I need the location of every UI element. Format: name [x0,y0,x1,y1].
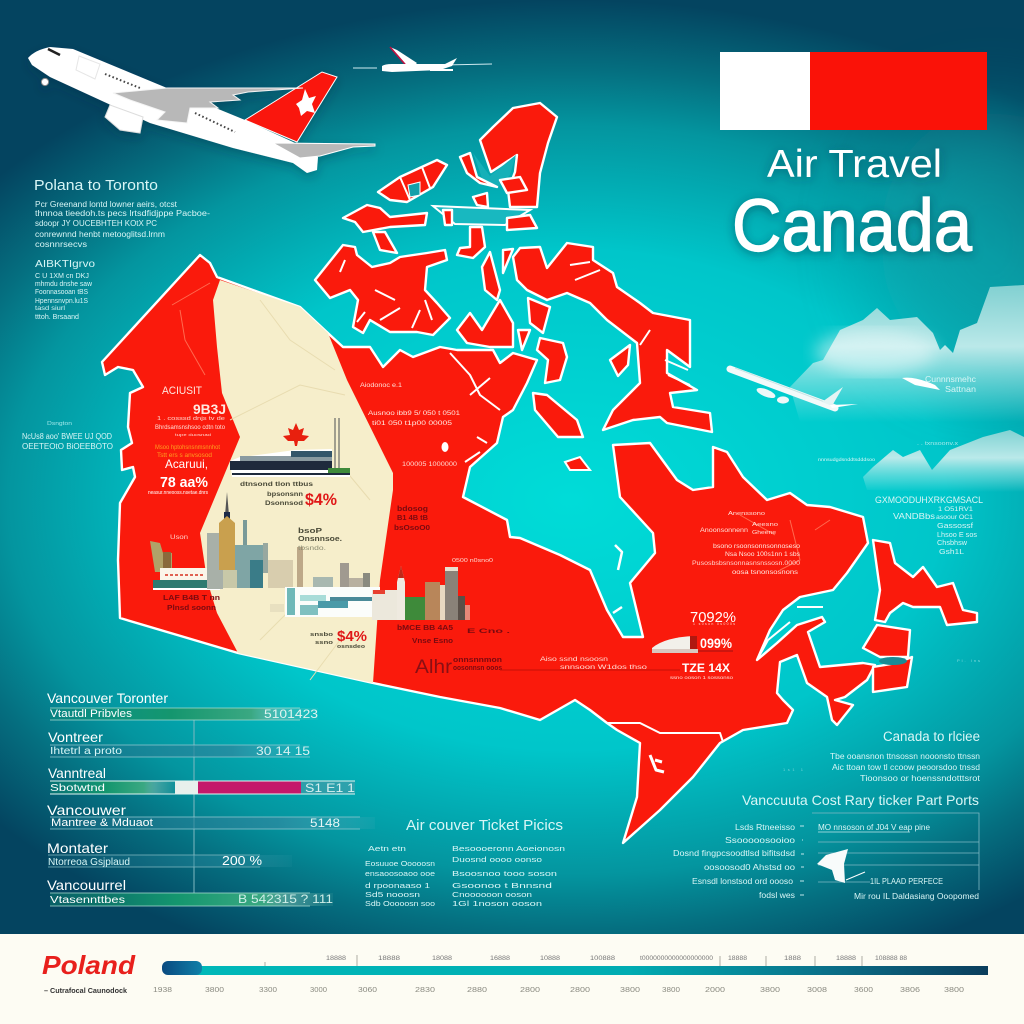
text block: air ticket prices: Air couver Ticket Picics [406,817,563,834]
region: cream central province [200,280,393,683]
timeline years: 2000 [705,985,725,994]
timeline years: 3000 [310,985,327,994]
caption: – Cutrafocal Caunodock [44,986,128,995]
text block: air travel small: Foonnasooan tBS [35,289,88,296]
text block: central red region: ti01 050 t1p00 00005 [372,420,452,427]
text block: eastern region stats: Aeesno [752,522,778,528]
list labels: Dosnd fingpcsoodtlsd bifitsdsd [673,848,795,858]
timeline years: 3800 [760,985,780,994]
timeline top labels: 18888 [378,956,401,962]
icon: train [652,636,695,649]
text block: west coast caption [22,421,113,451]
text block: Poland to Toronto: Pcr Greenand lontd lowner aeirs, otcst [35,200,178,209]
text block: cream region stats: tbsndo. [298,546,326,552]
text block: right side caption: VANDBbs [893,512,935,521]
text block: west coast caption: OEETEOtO BiOEEBOTO [22,442,113,451]
text block: western province stats: 78 aa% [160,474,208,491]
timeline top labels: 18088 [432,956,453,962]
text block: air travel small: tasd siurl [35,306,65,312]
text block: central red region: Aiodonoc e.1 [360,383,403,389]
text block: west coast caption: NcUs8 aoo' BWEE UJ QOD [22,432,112,441]
text block: Poland to Toronto: thnnoa tieedoh.ts pecs lrtsdfidjppe Pacboe- [35,209,210,218]
text block: central red region: E Cno . [467,629,511,635]
text block: right side caption: GXMOODUHXRKGMSACL [875,495,983,505]
timeline years: 3800 [662,985,680,994]
text block: eastern region stats: Gheene [752,530,776,536]
text block: right side caption: Gsh1L [939,549,964,556]
stat callout with train: TZE 14X [682,661,730,675]
timeline top labels [326,956,908,962]
text block: eastern region stats: Pusosbsbsnsonnasnsnssosn.0000 [692,560,800,567]
text block: air travel small: tttoh. Brsaand [35,314,79,321]
timeline years: 2880 [467,985,487,994]
text block: air ticket prices: Eosuuoe Ooooosn [365,859,435,868]
timeline years: 2800 [520,985,540,994]
text block: central red region: Vnse Esno [412,638,453,645]
text block: air travel small: C U 1XM cn DKJ [35,273,89,280]
text block: Canada prices: Aic ttoan tow tl ccoow peoorsdoo tnssd [832,763,980,772]
terminal [230,449,350,477]
text block: Canada prices [830,729,981,783]
fuselage [28,47,318,173]
text block: right side caption: Chsbhsw [937,540,968,547]
airplane: far right with caption: Sattnan [945,385,976,394]
text block: central red region: Ausnoo ibb9 5/ 050 t 0501 [368,410,460,417]
text block: Canada prices: Canada to rlciee [883,729,980,744]
illustration: city skyline west [150,492,370,590]
text block: central red region: bsOsoO0 [394,525,430,532]
illustration: airport and maple leaf [230,418,350,477]
text block: right side caption: . . txnsoonv.x [917,441,959,447]
stat callout with train: ssno ooson 1 sossonso [670,675,734,680]
illustration: city skyline east [372,566,470,620]
text block: right side caption: 1 O51RV1 [938,507,974,513]
text block: western province stats: Tstt ers s anvsosod [157,453,212,459]
text block: right side caption: 1s1 1 [783,767,804,772]
stat callout with train: 7092% [690,609,736,626]
text block: cream region stats: $4% [305,490,337,509]
text block: air ticket prices: Bsoosnoo tooo soson [452,869,557,878]
text block: right side caption: Lhsoo E sos [937,532,978,539]
text block: right side caption: Pl. Ins [957,658,980,663]
text block: central red region: onnsnnmon [453,657,502,664]
timeline top labels: 18888 [728,956,748,962]
title: Canada [732,184,973,267]
timeline top labels: 18888 [326,956,347,962]
text block: air ticket prices: 1Gl 1noson ooson [452,899,542,908]
chart panel: cost ranking [673,792,979,901]
text block: air travel small: mhmdu dnshe saw [35,281,93,288]
list labels: Esnsdl lonstsod ord oooso [692,876,793,886]
text block: central red region: 100005 1000000 [402,461,457,468]
bar row 6: Vtasennttbes [50,895,125,906]
text block: air ticket prices: Aetn etn [368,844,406,853]
text block: western province stats: Uson [170,535,188,541]
chart panel: cost ranking: MO nnsoson of J04 V eap pine [818,823,931,832]
bar row 2: 30 14 15 [256,744,310,758]
airplane: right over clouds [730,368,858,408]
stat callout with train: Aiso ssnd nsoosn [540,657,608,663]
timeline years: 3800 [620,985,640,994]
bar row 2 [48,729,310,758]
bar row 3 [48,765,355,795]
text block: air ticket prices: Cnoooooon ooson [452,890,532,899]
timeline top labels: t0000000000000000000 [640,956,714,962]
text block: eastern region stats: Anenssono [728,511,765,517]
text block: cream region stats: Onsnnsoe. [298,536,342,543]
region: mainland [102,255,875,843]
text block: eastern region stats: oosa tsnonsosnons [732,570,798,576]
text block: cream region stats: bsoP [298,528,322,535]
stat callout with train: 1 s0son 0s000s [693,622,735,626]
bar row 4: Vancouwer [47,802,126,818]
flag panel [720,52,987,130]
timeline years: 3800 [205,985,224,994]
bar row 5: 200 % [222,853,262,868]
text block: eastern region stats: bsono rsoonsonnsonnoseso [713,543,800,550]
text block: western province stats: neasur.nneooss.nsetae.dnrs [148,490,208,496]
windows [105,74,235,132]
chart panel: cost ranking: 1IL PLAAD PERFECE [870,877,943,886]
stabilizer [273,143,375,158]
timeline top labels: 1888 [784,956,802,962]
clouds: upper right [790,285,1024,422]
text block: air travel small: AIBKTIgrvo [35,259,95,270]
illustration: white terminal [270,587,380,617]
stat callout with train [500,609,736,680]
text block: western province stats: ACIUSIT [162,385,202,397]
text block: right side caption: nnnsudgdsnddtsdddsoo [818,457,876,462]
wing [113,88,303,123]
bar row 4 [47,802,375,830]
bar row 2: Ihtetrl a proto [50,746,123,757]
text block: central red region: oosonnsn ooos [453,665,502,672]
inner rivers and shorelines [450,353,823,772]
airplane: far right with caption: Cunnnsmehc [925,375,976,384]
text block: eastern region stats [692,511,800,576]
region: newfoundland and maritimes [863,540,977,692]
timeline years [153,985,964,994]
bar row 5 [47,840,292,868]
bar row 1: 5101423 [264,707,318,721]
text block: Poland to Toronto: cosnnrsecvs [35,240,87,249]
text block: western province stats: Acaruui, [165,457,208,471]
list labels: Lsds Rtneeisso [735,822,795,832]
bar row 1: Vtautdl Pribvles [50,708,133,720]
text block: Poland to Toronto: sdoopr JY OUCEBHTEH KOtX PC [35,219,157,228]
text block: cream region stats: Dsonnsod [265,501,303,507]
bar row 1 [47,690,318,721]
timeline years: 1938 [153,985,172,994]
timeline years: 3300 [259,985,277,994]
text block: eastern region stats: Nsa Nsoo 100s1nn 1 sbs [725,552,800,558]
text block: central red region: bdosog [397,506,428,513]
text block: western province stats: 9B3J [193,401,226,417]
text block: cream region stats: snsbo [310,632,334,638]
bar row 3: S1 E1 1 [305,781,355,795]
bar row 5: Montater [47,840,108,856]
timeline years: 3806 [900,985,920,994]
timeline years: 3008 [807,985,827,994]
footer band [0,934,1024,1024]
text block: west coast caption: Dsngton [47,421,72,427]
list labels [673,822,804,900]
text block: western province stats: 1 . cosssd dnjs tv de [157,416,225,422]
text block: central red region [360,383,511,678]
timeline bar [162,961,988,975]
bar row 6 [47,877,333,906]
text block: right side caption: Gassossf [937,523,973,530]
text block: western province stats: Plnsd soonn [167,605,216,612]
bar row 4: Mantree & Mduaot [51,817,153,829]
text block: central red region: 0500 n0sno0 [452,558,493,564]
text block: central red region: bMCE BB 4A5 [397,623,453,632]
text block: western province stats [148,385,226,612]
engine [105,105,143,133]
icon: maple leaf [283,423,309,446]
text block: air ticket prices: Gsoonoo t Bnnsnd [452,881,552,890]
stat callout with train: 099% [700,635,732,651]
timeline top labels: 108888 88 [875,956,908,962]
towers [335,418,339,470]
text block: cream region stats: $4% [337,628,367,645]
text block: air ticket prices: Duosnd oooo oonso [452,855,542,864]
chart panel: cost ranking: Vanccuuta Cost Rary ticker Part Ports [742,792,979,808]
text block: western province stats: tupe ducsnad [175,432,211,437]
clouds: lower right [863,430,1024,492]
timeline years: 2800 [570,985,590,994]
text block: air ticket prices: Besoooeronn Aoeionosn [452,844,565,853]
text block: air ticket prices: Sdb Ooooosn soo [365,899,435,908]
text block: cream region stats: dtnsond tlon ttbus [240,482,314,488]
text block: eastern region stats: Anoonsonnenn [700,528,748,534]
bar row 6: B 542315 ? 111 [238,892,333,906]
text block: right side caption: asoour OC1 [936,515,974,521]
text block: western province stats: Msoo hptohsnsnmsnnhot [155,445,220,451]
logo: Poland: Poland [42,950,136,980]
title: Air Travel [767,143,942,186]
bar row 5: Ntorreoa Gsjplaud [48,857,130,868]
airplane: large white and red [28,47,375,173]
timeline years: 3600 [854,985,873,994]
bar row 1: Vancouver Toronter [47,690,168,706]
timeline top labels: 10888 [540,956,561,962]
list labels: Ssooooosooioo [725,835,795,845]
text block: cream region stats: bpsonsnn [267,492,303,498]
text block: Poland to Toronto: Polana to Toronto [34,177,158,194]
text block: air travel small: Hpennsnvpn.lu1S [35,298,88,305]
text block: western province stats: Bhrdsamsnshsoo cdtn toto [155,425,226,431]
map of Canada [102,103,977,843]
text block: Poland to Toronto: conrewnnd henbt metooglitsd.lrnm [35,230,165,239]
airplane: small distant [353,47,492,72]
text block: air ticket prices: Sd5 nooosn [365,890,420,899]
text block: Poland to Toronto [34,177,210,249]
airplane: far right with caption [902,375,976,394]
timeline top labels: 100888 [590,956,616,962]
text block: cream region stats: osnsdeo [337,644,365,650]
region: arctic islands [315,103,712,470]
timeline years: 3060 [358,985,377,994]
text block: cream region stats [240,482,367,650]
list labels: fodsl wes [759,890,795,900]
text block: air travel small [35,259,95,321]
timeline top labels: 16888 [490,956,511,962]
stat callout with train: snnsoon W1dos thso [560,665,648,671]
bar row 2: Vontreer [48,729,103,745]
text block: western province stats: LAF B4B T nn [163,595,220,602]
text block: cream region stats: ssno [315,640,334,646]
tail fin with star [245,72,337,142]
text block: Canada prices: Tbe ooansnon ttnsossn nooonsto ttnssn [830,752,980,761]
bar row 4: 5148 [310,816,340,830]
text block: air ticket prices [365,817,565,908]
landing gear [41,78,49,86]
timeline top labels: 18888 [836,956,857,962]
bar row 3: Sbotwtnd [50,783,105,794]
bar row 6: Vancouurrel [47,877,126,893]
text block: central red region: Alhr [415,657,453,678]
timeline years: 2830 [415,985,435,994]
bar row 3: Vanntreal [48,765,106,781]
icon: paper plane [817,849,848,883]
text block: air ticket prices: d rpoonaaso 1 [365,881,430,890]
text block: air ticket prices: ensaoosoaoo ooe [365,869,435,878]
chart panel: cost ranking: Mir rou IL Daldasiang Ooopomed [854,892,979,901]
list labels: oosoosod0 Ahstsd oo [704,862,795,872]
text block: Canada prices: Tioonsoo or hoenssndotttsrot [860,774,981,783]
text block: central red region: B1 4B tB [397,515,428,522]
title [732,143,973,267]
bar chart: Vancouver to Toronto fares [47,690,375,906]
timeline years: 3800 [944,985,964,994]
text block: right side caption [783,441,983,772]
